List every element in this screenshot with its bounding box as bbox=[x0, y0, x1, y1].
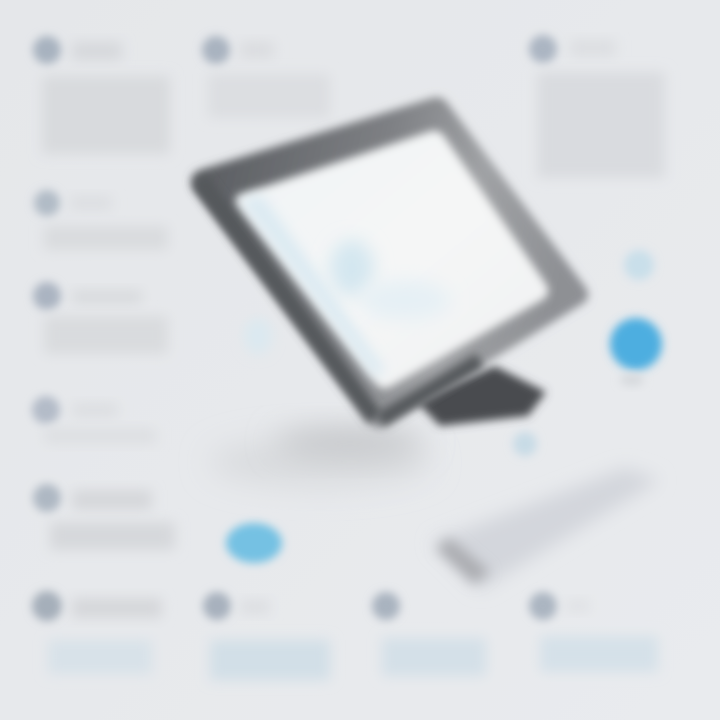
icon: top middle bbox=[202, 36, 230, 64]
heading: top right bbox=[570, 40, 616, 56]
heading: left item 5 bbox=[72, 490, 152, 510]
screen accent bbox=[240, 195, 385, 378]
icon: bottom item 4 bbox=[529, 592, 557, 620]
text block: left item 3 bbox=[44, 316, 168, 354]
heading: top left bbox=[72, 42, 122, 60]
screen chart bbox=[330, 240, 374, 296]
heading: left item 3 bbox=[72, 290, 142, 304]
panel: left item 2 bbox=[34, 190, 168, 250]
panel: left item 4 bbox=[32, 396, 156, 444]
icon: blue badge bbox=[610, 318, 662, 386]
panel: bottom item 2 bbox=[203, 592, 330, 680]
text block: top left bbox=[42, 76, 170, 154]
panel: bottom item 4 bbox=[529, 592, 658, 672]
tablet stand bbox=[415, 366, 546, 426]
tablet screen bbox=[236, 131, 548, 389]
icon: top right bbox=[529, 35, 557, 63]
panel: bottom item 1 bbox=[32, 591, 162, 674]
text block: left item 4 bbox=[44, 428, 156, 444]
heading: top middle bbox=[240, 42, 274, 58]
keyboard edge bbox=[436, 538, 490, 584]
tablet bbox=[191, 97, 588, 428]
icon: small light blue circle bbox=[624, 250, 654, 280]
heading: left item 2 bbox=[70, 196, 112, 210]
frame dark left edge bbox=[200, 180, 375, 418]
icon: left item 2 bbox=[34, 190, 60, 216]
tablet shadow bbox=[210, 428, 430, 486]
text block: bottom item 2 bbox=[210, 640, 330, 680]
icon: blue oval button bbox=[226, 523, 282, 563]
heading: bottom item 1 bbox=[72, 598, 162, 618]
keyboard bbox=[432, 468, 660, 590]
text block: bottom item 3 bbox=[382, 638, 486, 676]
icon: bottom item 3 bbox=[372, 592, 400, 620]
panel: left item 5 bbox=[33, 484, 175, 550]
panel: top left item bbox=[33, 36, 170, 154]
frame dark bottom edge bbox=[380, 360, 480, 420]
text block: top right bbox=[537, 72, 665, 178]
heading: bottom item 4 bbox=[566, 600, 590, 612]
panel: top right item bbox=[529, 35, 665, 178]
screen glow bbox=[360, 280, 450, 320]
icon: left item 3 bbox=[33, 282, 61, 310]
icon: small pale blue mark bbox=[244, 318, 272, 354]
panel: top middle item bbox=[202, 36, 330, 118]
icon: top left bbox=[33, 36, 61, 64]
heading: bottom item 2 bbox=[240, 600, 270, 614]
tablet frame bbox=[191, 97, 588, 428]
icon: bottom item 2 bbox=[203, 592, 231, 620]
heading: left item 4 bbox=[72, 403, 118, 417]
text block: left item 5 bbox=[50, 522, 175, 550]
panel: left item 3 bbox=[33, 282, 168, 354]
text block: bottom item 4 bbox=[540, 636, 658, 672]
text block: top middle bbox=[208, 74, 330, 118]
icon: small blue mark bbox=[513, 432, 537, 456]
panel: bottom item 3 bbox=[372, 592, 486, 676]
text block: left item 2 bbox=[44, 226, 168, 250]
keyboard body bbox=[432, 468, 660, 590]
icon: left item 4 bbox=[32, 396, 60, 424]
icon: left item 5 bbox=[33, 484, 61, 512]
text block: bottom item 1 bbox=[48, 640, 152, 674]
icon: bottom item 1 bbox=[32, 591, 62, 621]
